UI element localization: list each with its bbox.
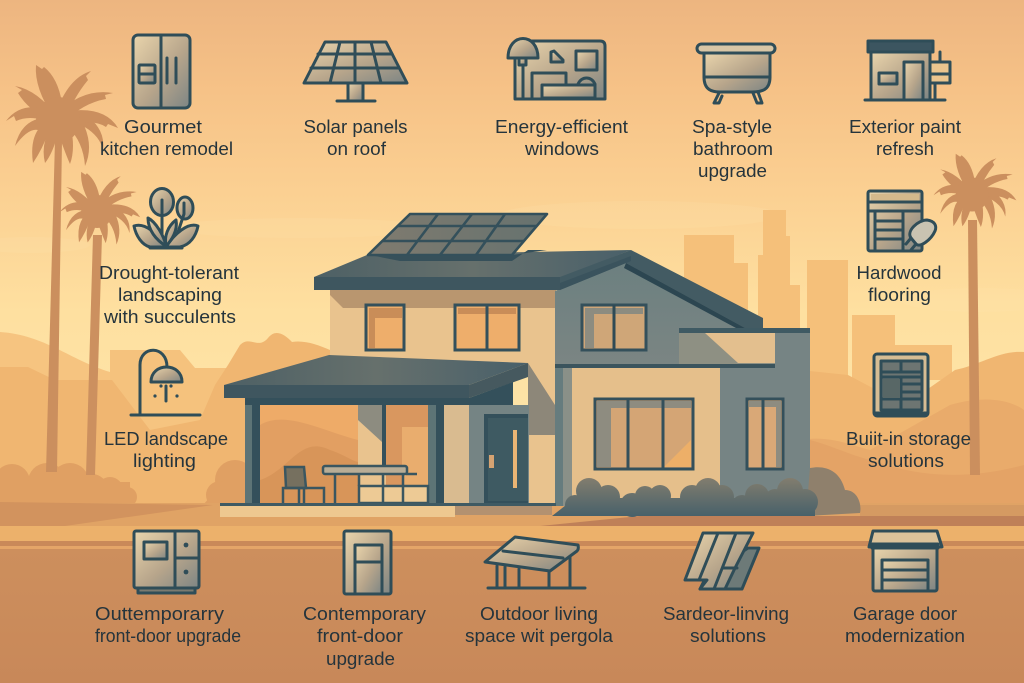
label: with succulents	[103, 306, 236, 327]
label: solutions	[690, 625, 766, 646]
porch posts	[245, 405, 444, 504]
label: Contemporary	[303, 603, 427, 624]
label: upgrade	[326, 648, 395, 669]
ground	[0, 502, 1024, 683]
label: front-door	[317, 625, 403, 646]
balcony	[555, 328, 810, 368]
label: solutions	[868, 450, 944, 471]
front door	[484, 414, 528, 503]
house illustration	[220, 214, 860, 517]
item: pergola	[465, 537, 614, 646]
porch roof	[224, 355, 528, 405]
icon: planks	[685, 533, 759, 589]
label: Drought-tolerant	[99, 262, 239, 283]
palm tree: right	[934, 154, 1016, 475]
label: Outdoor living	[480, 603, 598, 624]
large window	[595, 399, 693, 469]
upper cream wall	[330, 288, 556, 368]
label	[100, 116, 233, 159]
lower walls	[528, 330, 810, 506]
label: Sardeor-linving	[663, 603, 789, 624]
icon: flooring and brush	[868, 191, 936, 251]
item: garage door	[845, 531, 965, 646]
upper window middle	[455, 305, 519, 350]
icon: bathtub	[697, 44, 775, 103]
background bushes left	[0, 460, 262, 509]
label	[304, 116, 408, 159]
narrow window	[747, 399, 783, 469]
label: Outtemporarry	[95, 603, 225, 624]
icon: storage cabinet	[874, 354, 928, 416]
icon: garage	[869, 531, 942, 591]
item: bathroom	[692, 44, 775, 181]
label: LED landscape	[104, 428, 228, 449]
item: LED lighting	[104, 350, 228, 471]
background hills right	[800, 352, 1024, 505]
upper window right	[582, 305, 646, 350]
label: Hardwood	[856, 262, 942, 283]
label: landscaping	[118, 284, 222, 305]
label: flooring	[868, 284, 931, 305]
icon: succulents	[134, 188, 198, 248]
icon: cabinet unit	[134, 531, 199, 593]
item: built-in storage	[846, 354, 971, 471]
label	[663, 603, 789, 646]
label	[465, 603, 614, 646]
background hills left	[0, 332, 330, 505]
palm tree: tall left	[6, 65, 118, 472]
patio table and bench	[323, 466, 428, 503]
label	[303, 603, 427, 669]
soft clouds	[0, 201, 1024, 312]
label: kitchen remodel	[100, 138, 233, 159]
item: windows	[495, 38, 628, 159]
city skyline	[684, 210, 952, 405]
label: Buiit-in storage	[846, 428, 971, 449]
label	[692, 116, 773, 181]
item: outtemporarry door	[95, 531, 241, 646]
item: solar panels	[304, 42, 408, 159]
icon: paint and building	[865, 41, 950, 100]
label: windows	[524, 138, 599, 159]
item: exterior paint	[849, 41, 961, 159]
label	[845, 603, 965, 646]
palm tree: short left	[60, 172, 140, 475]
patio chair	[283, 467, 324, 503]
icon: landscape light	[131, 350, 200, 415]
label	[99, 262, 239, 327]
label: bathroom	[693, 138, 773, 159]
label	[856, 262, 942, 305]
porch interior	[260, 405, 529, 505]
label	[846, 428, 971, 471]
label: lighting	[133, 450, 196, 471]
label	[104, 428, 228, 471]
shrubs	[552, 467, 860, 517]
label: refresh	[876, 138, 934, 159]
porch slab	[220, 503, 556, 517]
label: Spa-style	[692, 116, 772, 137]
icon: door	[344, 531, 391, 594]
label: Garage door	[853, 603, 957, 624]
rooftop solar panel	[368, 214, 547, 255]
item: drought-tolerant landscaping	[99, 188, 239, 327]
label: modernization	[845, 625, 965, 646]
label: Gourmet	[124, 116, 202, 137]
label: on roof	[327, 138, 387, 159]
icon: solar panel	[304, 42, 407, 101]
label	[495, 116, 628, 159]
gable blue wall	[555, 262, 750, 366]
label: Energy-efficient	[495, 116, 628, 137]
label: Exterior paint	[849, 116, 961, 137]
upper window left	[366, 305, 404, 350]
item: gourmet kitchen	[100, 35, 233, 159]
icon: pergola	[485, 537, 585, 588]
item: sardeor-linving	[663, 533, 789, 646]
label	[849, 116, 961, 159]
label: Solar panels	[304, 116, 408, 137]
icon: refrigerator	[133, 35, 190, 108]
label: upgrade	[698, 160, 767, 181]
icon: room with lamp	[508, 38, 605, 99]
label: front-door upgrade	[95, 625, 241, 646]
label: space wit pergola	[465, 625, 614, 646]
sky background	[0, 0, 1024, 505]
item: hardwood flooring	[856, 191, 942, 305]
item: contemporary door	[303, 531, 427, 669]
label	[95, 603, 241, 646]
main roof	[314, 250, 763, 328]
